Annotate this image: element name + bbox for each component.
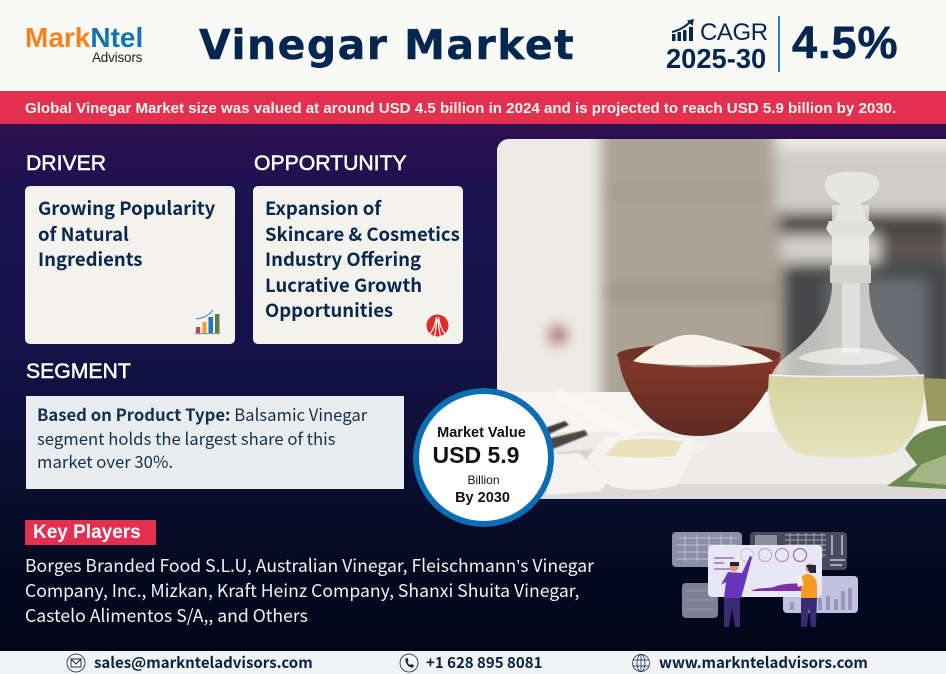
text: key players list: [25, 553, 594, 628]
brown bowl: [618, 355, 781, 436]
panel: segment: Based on Product Type: Balsamic Vinegar: [37, 402, 367, 426]
callout: market value circle: [413, 388, 554, 527]
CAGR block: CAGR: [700, 19, 768, 46]
footer contact bar: [0, 651, 946, 674]
panel: opportunity: Industry Offering: [265, 246, 421, 272]
spoon: [555, 390, 642, 437]
panel: driver: Ingredients: [38, 246, 142, 272]
rice: [633, 335, 773, 366]
callout: market value circle: Market Value: [437, 425, 526, 441]
heading: segment: SEGMENT: [26, 360, 131, 383]
panel: driver: of Natural: [38, 221, 129, 247]
heading: key players: Key Players: [33, 522, 141, 543]
illustration: analysts with dashboards: [672, 532, 858, 627]
CAGR percent: 4.5%: [792, 17, 899, 68]
analyst right: [795, 564, 817, 627]
icon: red emblem: [426, 314, 448, 336]
panel: opportunity: Expansion of: [265, 195, 381, 221]
panel: segment: [26, 396, 404, 489]
heading: driver: DRIVER: [26, 152, 106, 175]
panel: segment: market over 30%.: [37, 449, 173, 473]
callout: market value circle: Billion: [467, 473, 500, 487]
heading: key players: [25, 520, 156, 545]
CAGR block: [666, 16, 899, 74]
back panels: [672, 532, 858, 618]
panel: opportunity: Opportunities: [265, 297, 393, 323]
text: key players list: Company, Inc., Mizkan, Kraft Heinz Company, Shanxi Shuita Vinegar,: [25, 578, 579, 603]
small square dishes: [667, 437, 711, 457]
icon: growth bars: [672, 19, 694, 41]
panel: opportunity: Lucrative Growth: [265, 272, 422, 298]
icon: bar chart: [195, 310, 220, 334]
red summary banner: [0, 91, 946, 124]
contact: phone: +1 628 895 8081: [426, 652, 542, 673]
decanter: [768, 172, 925, 458]
analyst left: [721, 556, 752, 627]
basil leaves: [887, 378, 946, 489]
dark cards under the circle: [546, 420, 594, 459]
title: Vinegar Market: [199, 21, 575, 69]
dish under circle: [547, 453, 609, 495]
logo: MarkNtel Advisors: MarkNtel: [25, 22, 143, 53]
photo: vinegar decanter and bowls: [497, 139, 946, 499]
contact: email: sales@marknteladvisors.com: [94, 652, 313, 673]
white table: [550, 432, 922, 484]
header band: [0, 0, 946, 91]
contact: website: www.marknteladvisors.com: [659, 652, 868, 673]
panel: opportunity: [253, 186, 463, 344]
red summary banner: Global Vinegar Market size was valued at around USD 4.5 billion in 2024 and is projected to reach USD 5.9 billion by 2030.: [25, 100, 896, 116]
CAGR block: 2025-30: [666, 43, 766, 74]
panel: opportunity: Skincare & Cosmetics: [265, 221, 460, 247]
main dashboard: [708, 545, 822, 597]
panel: segment: segment holds the largest share of this: [37, 426, 335, 450]
text: key players list: Castelo Alimentos S/A,, and Others: [25, 603, 308, 628]
blurred kitchen background: [497, 139, 946, 392]
logo: MarkNtel Advisors: Advisors: [92, 50, 142, 65]
panel: driver: Growing Popularity: [38, 195, 215, 221]
vinegar liquid: [768, 375, 925, 458]
callout: market value circle: USD 5.9: [433, 442, 519, 468]
text: key players list: Borges Branded Food S.L.U, Australian Vinegar, Fleischmann’s Vinegar: [25, 553, 594, 578]
callout: market value circle: By 2030: [455, 490, 510, 506]
panel: driver: [25, 186, 235, 344]
heading: opportunity: OPPORTUNITY: [254, 152, 407, 175]
